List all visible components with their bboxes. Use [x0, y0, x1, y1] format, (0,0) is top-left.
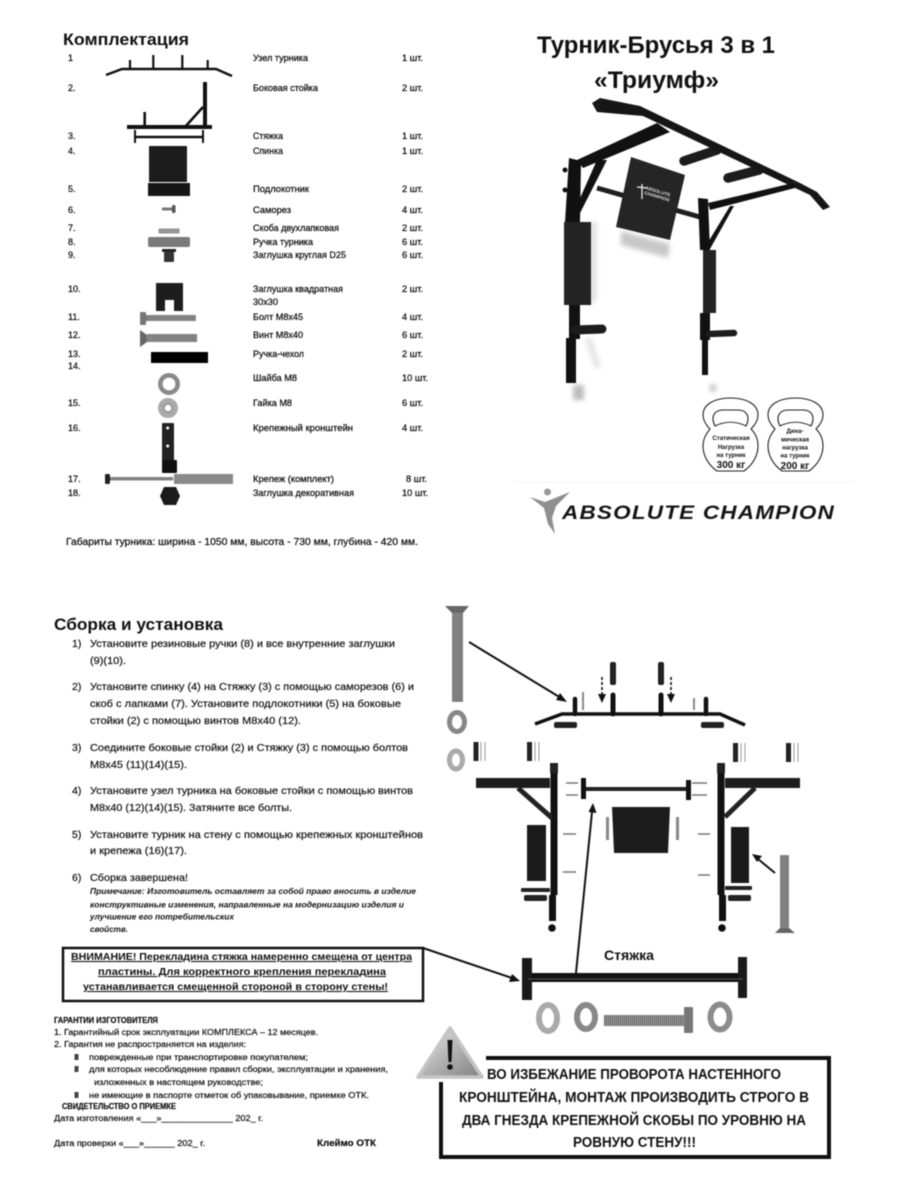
- logo figure: [530, 488, 570, 534]
- callout: tie bar offset warning: [63, 948, 423, 1001]
- item 13: handle cover: [68, 349, 423, 363]
- item 6: self-tapping screw: 6.: [68, 205, 76, 215]
- panel: warranty: Дата проверки «___»______ 202_ г.: [54, 1139, 205, 1148]
- item 15: nut: 6 шт.: [402, 398, 423, 408]
- item 11: bolt: 4 шт.: [402, 312, 423, 322]
- step 6: Сборка завершена!: [90, 872, 188, 884]
- step 2: [72, 681, 414, 727]
- item 8: grip: [68, 237, 423, 247]
- label: Стяжка: Стяжка: [604, 947, 654, 963]
- warning callout: mounting: КРОНШТЕЙНА, МОНТАЖ ПРОИЗВОДИТЬ СТРОГО В: [459, 1088, 809, 1106]
- arrow to pull-up unit: [469, 642, 567, 702]
- panel: warranty: СВИДЕТЕЛЬСТВО О ПРИЕМКЕ: [62, 1102, 177, 1111]
- callout: tie bar offset warning: пластины. Для корректного крепления перекладина: [98, 966, 386, 978]
- item 1: pull-up unit: Узел турника: [253, 53, 308, 63]
- item 15: nut: 15.: [68, 398, 81, 408]
- item 16: wall bracket: 4 шт.: [402, 423, 423, 433]
- item 14: washer: 10 шт.: [402, 373, 428, 383]
- item 5: armrest: 2 шт.: [402, 184, 423, 194]
- small bracket sets: [474, 742, 798, 762]
- panel: warranty: изложенных в настоящем руководстве;: [94, 1078, 263, 1087]
- item 12: screw: 6 шт.: [402, 330, 423, 340]
- panel: warranty: Клеймо ОТК: [317, 1138, 377, 1148]
- callout: tie bar offset warning: ВНИМАНИЕ! Перекладина стяжка намеренно смещена от центра: [71, 951, 412, 963]
- icon: kettlebell static load: Нагрузка: [718, 445, 745, 451]
- step 1: [72, 638, 395, 667]
- manufacturer note: Примечание: Изготовитель оставляет за собой право вносить в изделие: [90, 886, 416, 896]
- icon: warning triangle: [418, 1028, 482, 1077]
- manufacturer note: свойств.: [90, 924, 128, 934]
- warning callout: mounting: ВО ИЗБЕЖАНИЕ ПРОВОРОТА НАСТЕННОГО: [487, 1067, 781, 1083]
- item 13: handle cover: 2 шт.: [402, 349, 423, 359]
- step 1: Установите резиновые ручки (8) и все внутренние заглушки: [90, 638, 395, 650]
- panel: warranty: для которых несоблюдение правил сборки, эксплуатации и хранения,: [89, 1065, 388, 1074]
- item 13: handle cover: 13.: [68, 349, 81, 359]
- item 15: nut: [68, 398, 423, 415]
- item 18: decorative cap: Заглушка декоративная: [253, 488, 354, 498]
- manufacturer note: [89, 886, 416, 934]
- item 6: self-tapping screw: [68, 205, 423, 215]
- item 10: square plug: 30х30: [253, 297, 278, 307]
- step 4: 4): [72, 785, 81, 797]
- back pad with logo: ABSOLUTE: [645, 185, 671, 198]
- panel: warranty: 2. Гарантия не распространяется на изделия:: [54, 1040, 246, 1049]
- item 15: nut: Гайка М8: [253, 398, 292, 408]
- item 3: tie bar: [68, 130, 423, 143]
- item 3: tie bar: 3.: [68, 131, 76, 141]
- heading: assembly: Сборка и установка: [54, 615, 224, 634]
- panel: warranty: ГАРАНТИИ ИЗГОТОВИТЕЛЯ: [54, 1016, 158, 1025]
- item 4: back pad: 1 шт.: [402, 146, 423, 156]
- item 17: fastener set: 8 шт.: [406, 474, 427, 484]
- title: «Триумф»: [594, 67, 719, 94]
- step 3: Соедините боковые стойки (2) и Стяжку (3) с помощью болтов: [90, 742, 408, 754]
- item 14: washer: [68, 361, 428, 393]
- item 8: grip: 8.: [68, 237, 76, 247]
- tie bar in diagram: [581, 778, 691, 800]
- item 9: round plug: 9.: [68, 250, 76, 260]
- large countersunk screw: [445, 606, 469, 702]
- item 6: self-tapping screw: Саморез: [253, 205, 291, 215]
- left side post: [476, 763, 558, 932]
- dashed arrows to grips: [598, 677, 675, 703]
- arrow to armrest: [752, 854, 775, 873]
- item 11: bolt: Болт М8х45: [253, 312, 303, 322]
- item 16: wall bracket: 16.: [68, 423, 81, 433]
- warning callout: mounting: РОВНУЮ СТЕНУ!!!: [573, 1135, 696, 1151]
- panel: warranty: [54, 1016, 388, 1148]
- step 3: М8х45 (11)(14)(15).: [90, 759, 187, 771]
- item 14: washer: 14.: [68, 361, 81, 371]
- back pad with logo: CHAMPION: [644, 190, 670, 203]
- warning callout: mounting: [441, 1058, 829, 1157]
- small bolts: [563, 783, 710, 875]
- right arm and post: [698, 183, 795, 375]
- brand logo: Absolute Champion: ABSOLUTE CHAMPION: [561, 503, 835, 524]
- top bar: [592, 98, 830, 210]
- panel: assembly steps: [72, 638, 423, 934]
- icon: kettlebell static load: 300 кг: [717, 460, 745, 471]
- item 2: side post: 2 шт.: [402, 83, 423, 93]
- item 4: back pad: [68, 146, 423, 182]
- panel: warranty: поврежденные при транспортировке покупателем;: [89, 1053, 308, 1062]
- step 2: 2): [72, 681, 81, 693]
- top unit with grips: [535, 662, 745, 728]
- step 5: 5): [72, 829, 81, 841]
- step 1: (9)(10).: [90, 655, 126, 667]
- item 11: bolt: [68, 312, 423, 325]
- arrow: callout to tie bar: [423, 948, 520, 982]
- item 10: square plug: 10.: [68, 284, 81, 294]
- item 5: armrest: [68, 183, 423, 196]
- hardware detail: nut, washers, bolt: [539, 1004, 730, 1033]
- step 3: 3): [72, 742, 81, 754]
- item 5: armrest: Подлокотник: [253, 184, 309, 194]
- tie bar detail: [522, 957, 747, 1000]
- item 8: grip: 6 шт.: [402, 237, 423, 247]
- step 5: [72, 829, 423, 857]
- step 5: и крепежа (16)(17).: [90, 845, 187, 857]
- title: [537, 32, 775, 94]
- washer and nut: [450, 712, 464, 769]
- item 3: tie bar: Стяжка: [253, 131, 283, 141]
- heading: parts list: Комплектация: [63, 30, 189, 49]
- item 10: square plug: [68, 283, 423, 311]
- step 4: М8х40 (12)(14)(15). Затяните все болты.: [90, 802, 292, 814]
- item 9: round plug: [68, 249, 423, 262]
- item 13: handle cover: Ручка-чехол: [253, 349, 304, 359]
- manufacturer note: улучшение его потребительских: [89, 912, 235, 922]
- item 2: side post: [68, 82, 423, 128]
- item 17: fastener set: 17.: [68, 474, 81, 484]
- item 6: self-tapping screw: 4 шт.: [402, 205, 423, 215]
- step 6: 6): [72, 872, 81, 884]
- panel: parts list table: [68, 53, 428, 505]
- icon: kettlebell dynamic load: 200 кг: [781, 461, 809, 472]
- back pad with logo: [616, 157, 685, 240]
- item 18: decorative cap: 18.: [68, 488, 81, 498]
- callout: tie bar offset warning: устанавливается смещенной стороной в сторону стены!: [83, 981, 388, 993]
- item 14: washer: Шайба М8: [253, 373, 297, 383]
- step 4: [72, 785, 413, 814]
- item 11: bolt: 11.: [68, 312, 80, 322]
- item 8: grip: Ручка турника: [253, 237, 313, 247]
- manufacturer note: конструктивные изменения, направленные на модернизацию изделия и: [90, 900, 405, 910]
- item 3: tie bar: 1 шт.: [402, 131, 423, 141]
- step 3: [72, 742, 408, 771]
- icon: kettlebell dynamic load: нагрузка: [782, 446, 808, 452]
- icon: kettlebell static load: Статическая: [712, 436, 750, 442]
- step 1: 1): [72, 638, 81, 650]
- item 5: armrest: 5.: [68, 184, 76, 194]
- item 1: pull-up unit: [68, 53, 423, 76]
- dimensions text: Габариты турника: ширина - 1050 мм, высота - 730 мм, глубина - 420 мм.: [66, 536, 418, 548]
- item 2: side post: 2.: [68, 83, 76, 93]
- step 2: Установите спинку (4) на Стяжку (3) с помощью саморезов (6) и: [90, 681, 414, 693]
- item 9: round plug: Заглушка круглая D25: [253, 250, 346, 260]
- item 4: back pad: Спинка: [253, 146, 283, 156]
- icon: kettlebell dynamic load: [768, 398, 823, 472]
- item 7: bracket: [68, 223, 423, 233]
- item 12: screw: 12.: [68, 330, 81, 340]
- item 17: fastener set: [68, 474, 427, 484]
- icon: kettlebell static load: [703, 398, 758, 471]
- title: Турник-Брусья 3 в 1: [537, 32, 775, 59]
- icon: kettlebell dynamic load: на турник: [781, 454, 809, 460]
- icon: kettlebell dynamic load: Дина-: [787, 429, 803, 435]
- item 12: screw: Винт М8х40: [253, 330, 303, 340]
- long screw lower right: [775, 855, 795, 933]
- right side post: [717, 763, 800, 932]
- item 7: bracket: 7.: [68, 223, 76, 233]
- item 12: screw: [68, 330, 423, 347]
- item 16: wall bracket: Крепежный кронштейн: [253, 423, 353, 433]
- item 18: decorative cap: 10 шт.: [402, 488, 428, 498]
- warning callout: mounting: ДВА ГНЕЗДА КРЕПЕЖНОЙ СКОБЫ ПО УРОВНЮ НА: [462, 1111, 806, 1129]
- panel: exploded assembly diagram: [445, 606, 800, 973]
- arrow to tie bar plate: [576, 803, 596, 973]
- panel: warranty: 1. Гарантийный срок эксплуатации КОМПЛЕКСА – 12 месяцев.: [54, 1028, 318, 1037]
- item 1: pull-up unit: 1: [68, 53, 73, 63]
- item 2: side post: Боковая стойка: [253, 83, 318, 93]
- item 10: square plug: 2 шт.: [402, 284, 423, 294]
- item 1: pull-up unit: 1 шт.: [402, 53, 423, 63]
- item 7: bracket: Скоба двухлапковая: [253, 223, 339, 233]
- step 2: стойки (2) с помощью винтов М8х40 (12).: [90, 715, 301, 727]
- step 5: Установите турник на стену с помощью крепежных кронштейнов: [90, 829, 423, 841]
- back pad in diagram: [606, 807, 679, 853]
- item 7: bracket: 2 шт.: [402, 223, 423, 233]
- icon: kettlebell dynamic load: мическая: [781, 438, 810, 444]
- brand logo: Absolute Champion: [513, 482, 855, 534]
- left arm and post: [562, 123, 670, 383]
- item 4: back pad: 4.: [68, 146, 76, 156]
- item 17: fastener set: Крепеж (комплект): [253, 474, 334, 484]
- step 4: Установите узел турника на боковые стойки с помощью винтов: [90, 785, 413, 797]
- panel: warranty: Дата изготовления «___»______________ 202_ г.: [54, 1114, 263, 1123]
- item 9: round plug: 6 шт.: [402, 250, 423, 260]
- product photo: assembled pull-up bar: [562, 98, 830, 400]
- step 2: скоб с лапками (7). Установите подлокотники (5) на боковые: [90, 698, 401, 710]
- item 18: decorative cap: [68, 487, 428, 505]
- panel: warranty: не имеющие в паспорте отметок об упаковывание, приемке ОТК.: [89, 1091, 369, 1100]
- item 16: wall bracket: [68, 423, 423, 473]
- item 10: square plug: Заглушка квадратная: [253, 284, 343, 294]
- icon: kettlebell static load: на турник: [717, 453, 745, 459]
